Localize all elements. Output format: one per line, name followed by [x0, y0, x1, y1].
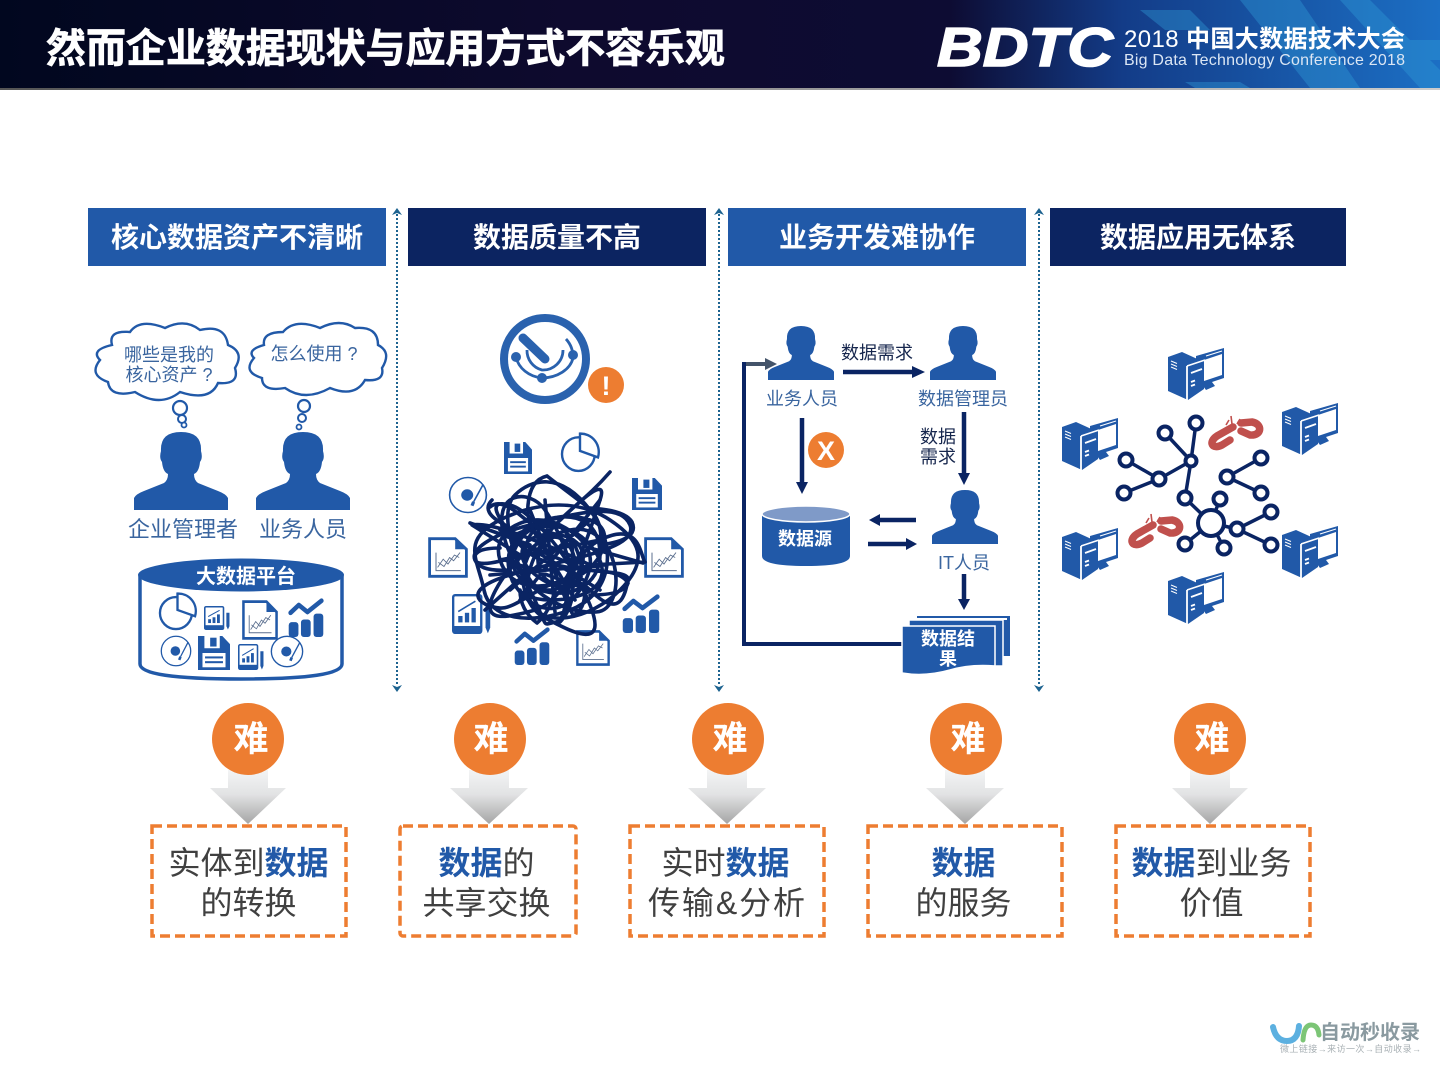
floppy icon — [632, 478, 662, 510]
loop arrow: result back to business — [744, 358, 904, 644]
icon: data manager — [930, 326, 996, 380]
badge: 难: 难 — [1194, 720, 1230, 759]
result box: 价值 — [1179, 885, 1244, 921]
result box — [630, 826, 824, 936]
badge: 难: 难 — [233, 720, 269, 759]
icon: X blocked: X — [817, 436, 835, 466]
data result document stack: 果 — [939, 649, 957, 669]
arrow: business to manager — [843, 366, 925, 378]
panel heading: 数据质量不高 — [408, 208, 706, 266]
label: 数据需求 side: 需求 — [920, 447, 956, 467]
arrow down — [926, 770, 1004, 824]
tangled scribble — [470, 472, 645, 634]
badge: 难 — [1174, 703, 1246, 775]
label: IT人员: IT人员 — [938, 553, 990, 573]
arrow down — [688, 770, 766, 824]
data source cylinder — [762, 506, 850, 566]
tablet icon — [453, 595, 490, 633]
watermark logo — [1273, 1021, 1421, 1054]
result box — [1116, 826, 1310, 936]
thought cloud: manager: 核心资产 ? — [125, 365, 213, 385]
logo: BDTC 2018: 2018 中国大数据技术大会 — [1124, 26, 1405, 53]
column 4: difficulty to result — [868, 703, 1062, 936]
arrow: source to IT — [868, 538, 917, 550]
watermark logo: 自动秒收录 — [1320, 1021, 1420, 1044]
icon: X blocked — [808, 432, 844, 468]
network graph — [1118, 416, 1278, 554]
big data platform cylinder — [138, 558, 344, 679]
result box: 数据 — [931, 845, 996, 881]
result box: 实体到数据 — [168, 845, 329, 881]
label: 数据需求 top: 数据需求 — [841, 343, 913, 363]
result box: 共享交换 — [422, 885, 551, 921]
doc icon — [430, 539, 466, 576]
result box: 传输&分析 — [648, 885, 805, 921]
icon: broken link lower — [1132, 514, 1180, 545]
doc icon — [646, 539, 682, 576]
panel heading: 数据应用无体系 — [1050, 208, 1346, 266]
icon: business staff — [768, 326, 834, 380]
column 3: difficulty to result — [630, 703, 824, 936]
icon: broken link upper — [1212, 416, 1260, 447]
badge: 难: 难 — [473, 720, 509, 759]
data result document stack: 数据结 — [921, 629, 975, 649]
thought cloud: business staff — [250, 323, 386, 430]
icon: alert: ! — [602, 371, 610, 401]
label: 业务人员: 业务人员 — [766, 389, 838, 409]
label: 数据需求 side: 数据 — [920, 427, 956, 447]
icon: alert — [588, 367, 624, 403]
panel heading: 业务开发难协作 — [728, 208, 1026, 266]
disc icon — [450, 478, 486, 512]
arrow: IT to result — [958, 574, 970, 610]
icon: IT staff — [932, 490, 998, 544]
header band — [0, 0, 1440, 90]
arrow down — [210, 770, 286, 824]
arrow down — [450, 770, 528, 824]
panel heading: 核心数据资产不清晰: 核心数据资产不清晰 — [111, 222, 363, 253]
badge: 难: 难 — [712, 720, 748, 759]
icon: radar — [504, 318, 586, 400]
pie icon — [562, 434, 599, 471]
arrow down — [1172, 770, 1248, 824]
badge: 难 — [212, 703, 284, 775]
bars icon — [623, 597, 659, 633]
panel: core data assets — [96, 323, 386, 679]
bars icon — [515, 630, 549, 665]
thought cloud: manager: 哪些是我的 — [124, 345, 214, 365]
dotted double arrow 3 — [1034, 208, 1044, 692]
panel: business collaboration flow — [744, 326, 1010, 674]
thought cloud: manager — [96, 323, 239, 428]
badge: 难: 难 — [950, 720, 986, 759]
result box — [868, 826, 1062, 936]
arrow: business to source — [796, 418, 808, 494]
panel: data quality — [430, 318, 682, 665]
floppy icon — [504, 442, 532, 474]
result box: 的服务 — [915, 885, 1012, 921]
logo: BDTC 2018 — [937, 16, 1405, 78]
arrow: manager to IT — [958, 412, 970, 485]
icon: manager — [134, 432, 228, 510]
badge: 难 — [454, 703, 526, 775]
label: 数据需求 side — [920, 427, 956, 467]
panel heading: 数据应用无体系: 数据应用无体系 — [1100, 222, 1296, 253]
panel: no application system — [1062, 348, 1338, 624]
result box: 数据到业务 — [1131, 845, 1292, 881]
result box — [152, 826, 346, 936]
result box: 实时数据 — [661, 845, 790, 881]
thought cloud: business staff: 怎么使用 ? — [270, 344, 358, 364]
big data platform cylinder: 大数据平台 — [196, 564, 296, 588]
watermark logo: 微上链接→来访一次→自动收录→ — [1280, 1043, 1421, 1054]
column 5: difficulty to result — [1116, 703, 1310, 936]
data source cylinder: 数据源 — [778, 529, 832, 549]
dotted double arrow 1 — [392, 208, 402, 692]
panel heading: 数据质量不高: 数据质量不高 — [473, 222, 641, 253]
badge: 难 — [930, 703, 1002, 775]
logo: BDTC 2018: BDTC — [937, 16, 1114, 78]
data result document stack — [902, 616, 1010, 674]
column 2: difficulty to result — [400, 703, 576, 936]
panel heading: 业务开发难协作: 业务开发难协作 — [779, 222, 975, 253]
logo: BDTC 2018: Big Data Technology Conference 2018 — [1124, 52, 1405, 69]
label: 业务人员: 业务人员 — [259, 517, 347, 542]
dotted double arrow 2 — [714, 208, 724, 692]
computer icons ring — [1062, 348, 1338, 624]
column 1: difficulty to result — [152, 703, 346, 936]
arrow: IT to source — [869, 514, 916, 526]
result box: 的转换 — [200, 885, 297, 921]
panel heading: 核心数据资产不清晰 — [88, 208, 386, 266]
label: 数据管理员: 数据管理员 — [918, 389, 1008, 409]
title: 然而企业数据现状与应用方式不容乐观 — [46, 27, 725, 71]
label: 企业管理者: 企业管理者 — [128, 517, 238, 542]
result box — [400, 826, 576, 936]
icon: business staff — [256, 432, 350, 510]
result box: 数据的 — [438, 845, 535, 881]
badge: 难 — [692, 703, 764, 775]
doc icon — [577, 631, 609, 665]
